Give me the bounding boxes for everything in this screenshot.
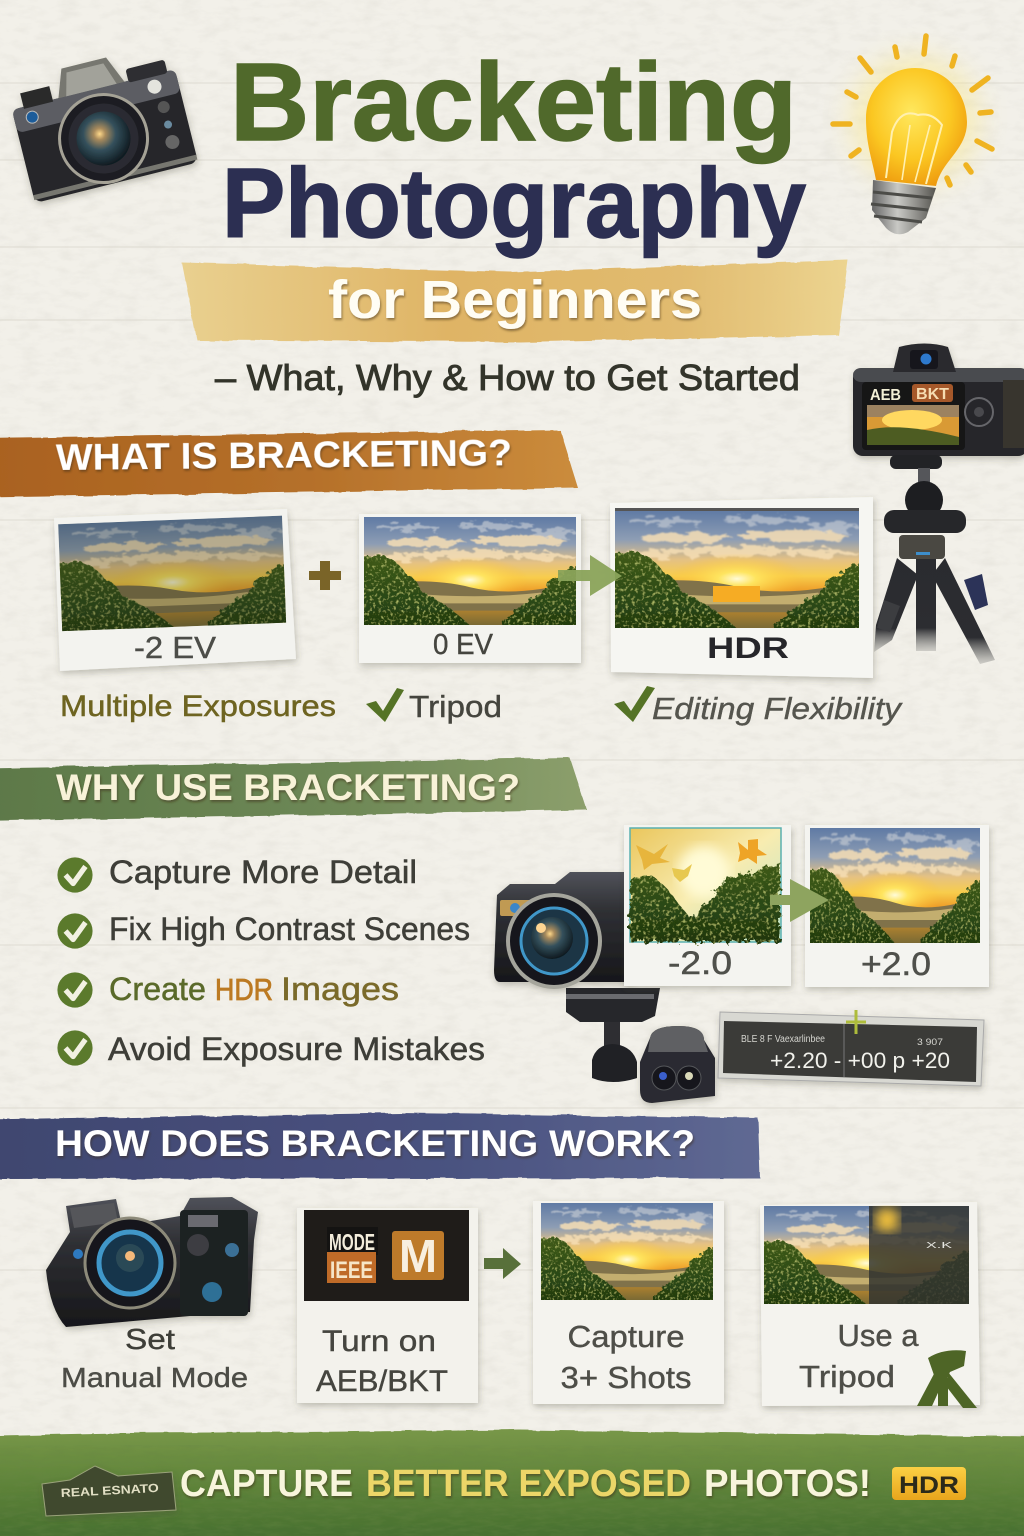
item: fix high contrast: Fix High Contrast Scenes [109, 911, 470, 947]
section heading: how does bracketing work [0, 1113, 760, 1179]
item: create HDR images [57, 971, 399, 1008]
icon: check [614, 686, 655, 722]
step: turn on AEB/BKT: Turn on [322, 1325, 436, 1358]
tagline: – What, Why & How to Get Started [215, 357, 800, 398]
icon: camera on tripod: BKT [916, 386, 949, 403]
step: turn on AEB/BKT: MODE [329, 1229, 375, 1255]
title: Photography: Photography [222, 148, 806, 258]
icon: plus [309, 561, 341, 590]
step: turn on AEB/BKT: IEEE [330, 1257, 373, 1284]
section heading: how does bracketing work: HOW DOES BRACKETING WORK? [55, 1123, 695, 1164]
badge: HDR [892, 1467, 966, 1500]
footer text: PHOTOS! [704, 1463, 871, 1505]
photo: HDR [605, 497, 873, 678]
icon: check [366, 688, 404, 722]
arrow: exposure [770, 879, 829, 922]
section heading: why use bracketing: WHY USE BRACKETING? [56, 767, 520, 808]
footer text: BETTER EXPOSED [366, 1463, 691, 1505]
section heading: why use bracketing [0, 758, 587, 821]
badge: real estate sign [42, 1466, 176, 1516]
label: Tripod: Tripod [409, 689, 502, 724]
step: turn on AEB/BKT: M [399, 1230, 437, 1282]
step: use a tripod [755, 1202, 980, 1408]
step: use a tripod: Use a [838, 1318, 919, 1353]
item: create HDR images: HDR [215, 972, 273, 1007]
list: reasons [57, 854, 485, 1067]
footer text [180, 1463, 871, 1505]
footer band [0, 1430, 1024, 1536]
banner: for Beginners [182, 260, 848, 342]
label: Multiple Exposures: Multiple Exposures [60, 690, 336, 723]
item: capture more detail: Capture More Detail [109, 854, 417, 890]
item: avoid exposure mistakes: Avoid Exposure Mistakes [108, 1031, 485, 1067]
photo: -2.0 overexposed: -2.0 [668, 945, 732, 981]
photo: 0 EV: 0 EV [433, 629, 494, 661]
step: set manual mode [46, 1197, 258, 1393]
icon: camera on tripod: AEB [870, 387, 901, 404]
step: capture 3+ shots: Capture [568, 1319, 684, 1354]
footer text: CAPTURE [180, 1463, 353, 1505]
panel: exposure readout: +2.20 - +00 p +20 [770, 1048, 950, 1073]
step: capture 3+ shots: 3+ Shots [560, 1360, 692, 1395]
photo: -2 EV [49, 509, 296, 671]
step: use a tripod: Tripod [799, 1359, 895, 1394]
title: Bracketing: Bracketing [230, 41, 797, 164]
photo: -2.0 overexposed [624, 825, 791, 986]
step: set manual mode: Set [125, 1324, 175, 1356]
label: Editing Flexibility: Editing Flexibility [652, 691, 904, 726]
photo: 0 EV [355, 514, 585, 663]
icon: camera with lens [494, 872, 630, 987]
step: capture 3+ shots [533, 1201, 724, 1404]
subtitle: for Beginners: for Beginners [328, 270, 702, 330]
step: turn on AEB/BKT: AEB/BKT [316, 1365, 448, 1398]
arrow: to HDR [558, 555, 622, 596]
step: turn on AEB/BKT [297, 1208, 478, 1403]
icon: light bulb [833, 36, 992, 234]
icon: tripod head [566, 988, 660, 1082]
icon: vintage camera [5, 42, 198, 203]
section heading: what is bracketing [0, 430, 578, 497]
panel: exposure readout: 3 907 [917, 1037, 943, 1047]
photo: HDR: HDR [707, 632, 789, 665]
step: use a tripod: X.K [926, 1241, 953, 1250]
arrow: next step [484, 1248, 521, 1279]
item: create HDR images: Create [109, 971, 206, 1007]
icon: camera [46, 1197, 258, 1327]
icon: small dual lens device [640, 1026, 715, 1103]
panel: exposure readout: BLE 8 F Vaexarlinbee [741, 1034, 825, 1045]
icon: tripod [917, 1350, 977, 1408]
icon: camera on tripod [853, 344, 1024, 664]
badge: real estate sign: REAL ESNATO [60, 1481, 159, 1500]
badge: HDR: HDR [899, 1472, 959, 1499]
photo: +2.0 [803, 825, 989, 987]
step: set manual mode: Manual Mode [61, 1362, 248, 1393]
item: create HDR images: Images [281, 971, 399, 1007]
section heading: what is bracketing: WHAT IS BRACKETING? [56, 432, 512, 478]
panel: exposure readout [718, 1010, 984, 1086]
photo: -2 EV: -2 EV [134, 630, 216, 665]
photo: +2.0: +2.0 [861, 946, 931, 982]
